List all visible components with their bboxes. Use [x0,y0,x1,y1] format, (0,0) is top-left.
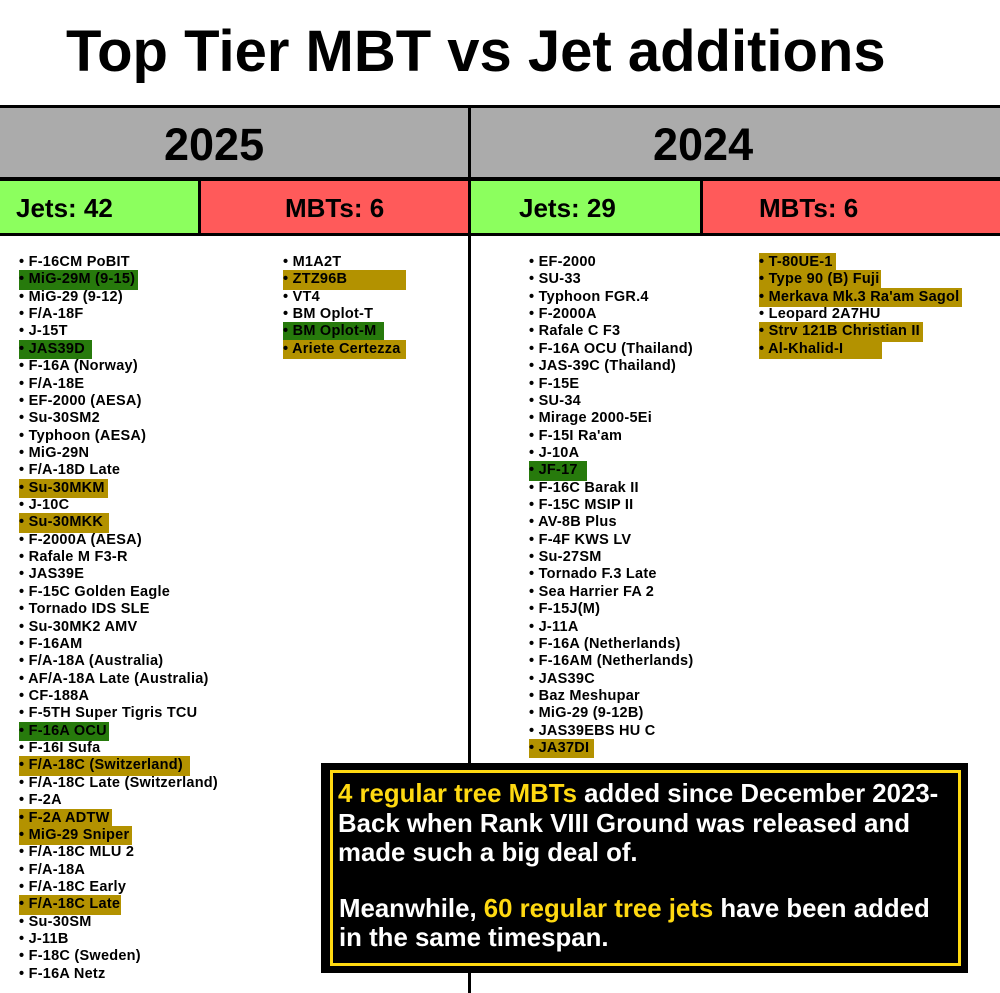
callout [321,763,968,973]
callout text: Meanwhile, 60 regular tree jets have been added [339,895,930,923]
jets count 2025 [0,181,198,233]
list: 2025 jets: • F/A-18C Late (Switzerland) [19,775,218,791]
list: 2024 jets: • Mirage 2000-5Ei [529,410,652,426]
list: 2024 jets: • F-16A OCU (Thailand) [529,341,693,357]
MBT count 2025 [201,181,468,233]
list: 2025 jets: • F-2A ADTW [19,810,110,826]
panel: 2025 header [0,105,468,236]
MBT count 2024: MBTs: 6 [759,193,858,223]
list: 2025 jets: • F-2000A (AESA) [19,532,142,548]
list: 2025 jets: • F-16A Netz [19,966,106,982]
list: 2024 jets: • F-15E [529,376,579,392]
jets count 2024: Jets: 29 [519,193,616,223]
list: 2024 jets: • MiG-29 (9-12B) [529,705,644,721]
list: 2025 jets: • F-5TH Super Tigris TCU [19,705,197,721]
center divider [468,105,471,993]
year heading 2025: 2025 [164,119,264,170]
list: 2025 jets: • F/A-18A [19,862,85,878]
list: 2024 MBTs [759,253,962,359]
list: 2025 jets: • MiG-29 (9-12) [19,289,123,305]
list: 2025 jets: • F-18C (Sweden) [19,948,141,964]
list: 2024 jets: • F-15C MSIP II [529,497,633,513]
list: 2025 jets: • EF-2000 (AESA) [19,393,142,409]
list: 2024 MBTs: • T-80UE-1 [759,254,833,270]
list: 2025 jets: • F/A-18A (Australia) [19,653,163,669]
callout text [338,780,938,952]
list: 2025 jets: • Tornado IDS SLE [19,601,150,617]
callout border [330,770,961,966]
title: Top Tier MBT vs Jet additions [66,19,886,84]
year heading 2024 [471,108,1000,177]
list: 2025 jets: • F-16AM [19,636,82,652]
list: 2025 jets: • MiG-29 Sniper [19,827,129,843]
list: 2024 MBTs: • Leopard 2A7HU [759,306,881,322]
callout text: in the same timespan. [339,924,609,952]
list: 2024 jets: • J-11A [529,619,579,635]
list: 2024 MBTs: • Al-Khalid-I [759,341,843,357]
list: 2024 jets: • EF-2000 [529,254,596,270]
list: 2025 MBTs: • BM Oplot-M [283,323,376,339]
list: 2024 jets: • Su-27SM [529,549,602,565]
MBT count 2025: MBTs: 6 [285,193,384,223]
list: 2024 jets: • JAS-39C (Thailand) [529,358,676,374]
list: 2025 jets: • MiG-29M (9-15) [19,271,135,287]
list: 2025 jets: • Typhoon (AESA) [19,428,146,444]
list: 2025 jets: • F-16I Sufa [19,740,100,756]
list: 2025 jets: • JAS39E [19,566,84,582]
list: 2024 jets: • F-16AM (Netherlands) [529,653,693,669]
list: 2024 jets: • AV-8B Plus [529,514,617,530]
list: 2024 MBTs: • Merkava Mk.3 Ra'am Sagol [759,289,959,305]
list: 2024 jets: • Rafale C F3 [529,323,620,339]
list: 2024 MBTs: • Type 90 (B) Fuji [759,271,880,287]
list: 2024 jets: • F-4F KWS LV [529,532,631,548]
list: 2024 jets: • Tornado F.3 Late [529,566,657,582]
list: 2025 jets: • CF-188A [19,688,89,704]
list: 2025 jets: • Rafale M F3-R [19,549,128,565]
list: 2025 jets: • Su-30MKK [19,514,103,530]
list: 2024 jets: • Baz Meshupar [529,688,640,704]
list: 2024 jets: • F-15J(M) [529,601,600,617]
list: 2024 jets [529,254,693,758]
list: 2024 jets: • JA37DI [529,740,589,756]
list: 2024 jets: • Typhoon FGR.4 [529,289,649,305]
list: 2025 jets: • F-16A (Norway) [19,358,138,374]
list: 2024 MBTs: • Strv 121B Christian II [759,323,920,339]
list: 2025 jets: • F-16A OCU [19,723,107,739]
list: 2025 jets: • F-2A [19,792,62,808]
list: 2025 jets: • J-10C [19,497,69,513]
callout text: made such a big deal of. [338,839,638,867]
list: 2025 jets: • F/A-18C Late [19,896,120,912]
jets count 2024 [471,181,700,233]
list: 2024 jets: • J-10A [529,445,579,461]
list: 2024 jets: • JAS39C [529,671,595,687]
list: 2025 jets: • F/A-18C Early [19,879,126,895]
list: 2025 jets: • F-15C Golden Eagle [19,584,170,600]
list: 2024 jets: • SU-34 [529,393,581,409]
list: 2025 MBTs: • M1A2T [283,254,341,270]
list: 2024 jets: • F-16C Barak II [529,480,639,496]
list: 2025 jets: • Su-30MKM [19,480,105,496]
list: 2024 jets: • F-15I Ra'am [529,428,622,444]
list: 2025 jets: • Su-30SM2 [19,410,100,426]
list: 2025 jets: • Su-30SM [19,914,92,930]
list: 2024 jets: • JF-17 [529,462,578,478]
list: 2025 jets: • J-15T [19,323,68,339]
list: 2025 MBTs: • BM Oplot-T [283,306,373,322]
callout text: 4 regular tree MBTs added since December 2023- [338,780,938,808]
list: 2025 jets: • JAS39D [19,341,85,357]
list: 2025 jets: • F/A-18C MLU 2 [19,844,134,860]
list: 2025 MBTs: • VT4 [283,289,320,305]
list: 2024 jets: • F-2000A [529,306,597,322]
MBT count 2024 [703,181,1000,233]
list: 2024 jets: • Sea Harrier FA 2 [529,584,654,600]
year heading 2025 [0,108,468,177]
list: 2024 jets: • JAS39EBS HU C [529,723,655,739]
list: 2025 jets: • F/A-18E [19,376,84,392]
list: 2025 jets [19,254,218,982]
list: 2025 jets: • F/A-18F [19,306,84,322]
list: 2025 MBTs: • Ariete Certezza [283,341,401,357]
list: 2025 jets: • F/A-18C (Switzerland) [19,757,183,773]
list: 2025 jets: • MiG-29N [19,445,89,461]
panel: 2024 header [471,105,1000,236]
year heading 2024: 2024 [653,119,753,170]
list: 2024 jets: • SU-33 [529,271,581,287]
list: 2025 jets: • AF/A-18A Late (Australia) [19,671,209,687]
list: 2025 jets: • F/A-18D Late [19,462,120,478]
jets count 2025: Jets: 42 [16,193,113,223]
list: 2024 jets: • F-16A (Netherlands) [529,636,681,652]
list: 2025 jets: • Su-30MK2 AMV [19,619,137,635]
list: 2025 jets: • F-16CM PoBIT [19,254,130,270]
list: 2025 jets: • J-11B [19,931,69,947]
list: 2025 MBTs [283,254,406,359]
callout text: Back when Rank VIII Ground was released and [338,810,910,838]
list: 2025 MBTs: • ZTZ96B [283,271,347,287]
